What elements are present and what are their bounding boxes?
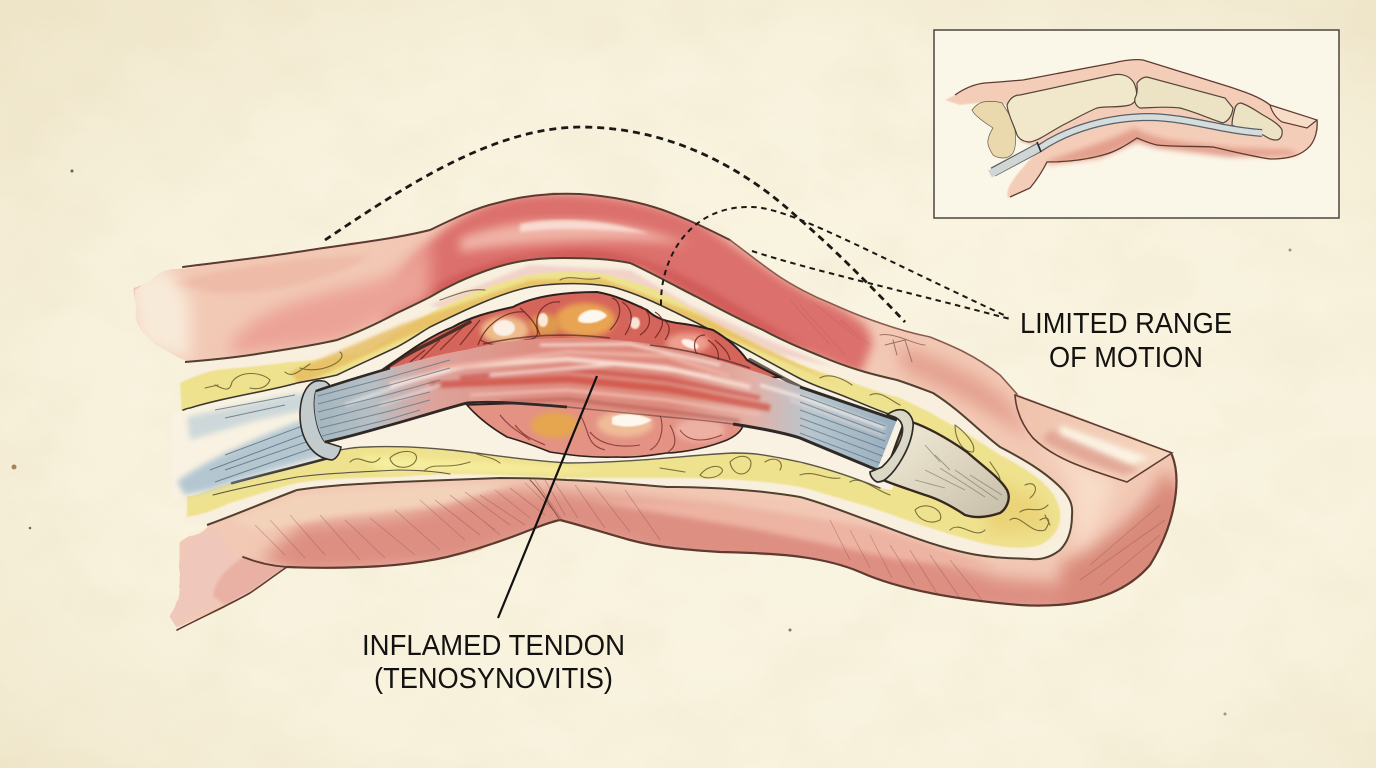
distal sheath ring bbox=[870, 410, 913, 482]
cavity membrane lines bbox=[183, 284, 900, 495]
illustration: finger cross-section bbox=[125, 193, 1190, 630]
proximal sheath sleeve bbox=[177, 393, 325, 495]
label: limited range of motion: LIMITED RANGE bbox=[1020, 308, 1232, 340]
inner cavity bbox=[172, 284, 912, 500]
label: inflamed tendon: (TENOSYNOVITIS) bbox=[374, 663, 613, 695]
inset proximal phalanx bbox=[1007, 74, 1137, 142]
subcutaneous layer outer membrane bbox=[185, 258, 1072, 559]
inflamed synovium: lower bbox=[467, 400, 743, 457]
inset metacarpal bbox=[972, 101, 1016, 158]
dashed arc: full range of motion bbox=[325, 127, 905, 322]
lower skin bbox=[259, 482, 1076, 604]
hatching on lower skin bbox=[255, 300, 1165, 600]
inset distal phalanx bbox=[1232, 103, 1282, 140]
inset finger shading bbox=[1045, 128, 1300, 165]
inset nail bbox=[1270, 105, 1317, 128]
label: limited range of motion: OF MOTION bbox=[1049, 342, 1203, 374]
motion arcs bbox=[325, 127, 1010, 322]
proximal sheath ring bbox=[300, 381, 341, 460]
label: limited range of motion bbox=[1020, 308, 1232, 374]
label: inflamed tendon: INFLAMED TENDON bbox=[362, 630, 625, 662]
fat lobule scribbles bbox=[205, 278, 1050, 533]
dashed arc: limited range bbox=[661, 207, 1008, 317]
inset sheath bbox=[993, 147, 1040, 172]
inset panel: healthy finger bbox=[934, 30, 1339, 218]
yellow fat layer bbox=[180, 272, 1060, 548]
distal tendon cap bbox=[883, 420, 1009, 517]
inset tendon bbox=[1040, 117, 1262, 148]
finger outline bbox=[177, 194, 1176, 630]
inset middle phalanx bbox=[1135, 77, 1233, 123]
dashed pointer to label bbox=[752, 251, 1010, 319]
label: inflamed tendon bbox=[362, 630, 625, 695]
inset sheath highlight bbox=[990, 147, 1040, 174]
inflamed synovium: upper bbox=[383, 292, 800, 387]
distal tendon hatching bbox=[915, 445, 1002, 500]
nail bbox=[1015, 395, 1172, 482]
inset finger outline bbox=[955, 60, 1317, 197]
skin shading washes bbox=[125, 193, 1190, 625]
inset sheath mark bbox=[1037, 142, 1041, 152]
tendon with inflamed fibres bbox=[314, 335, 897, 470]
skin base wash bbox=[135, 194, 1176, 628]
inset finger skin bbox=[945, 60, 1317, 198]
leader line to tendon bbox=[498, 376, 597, 618]
